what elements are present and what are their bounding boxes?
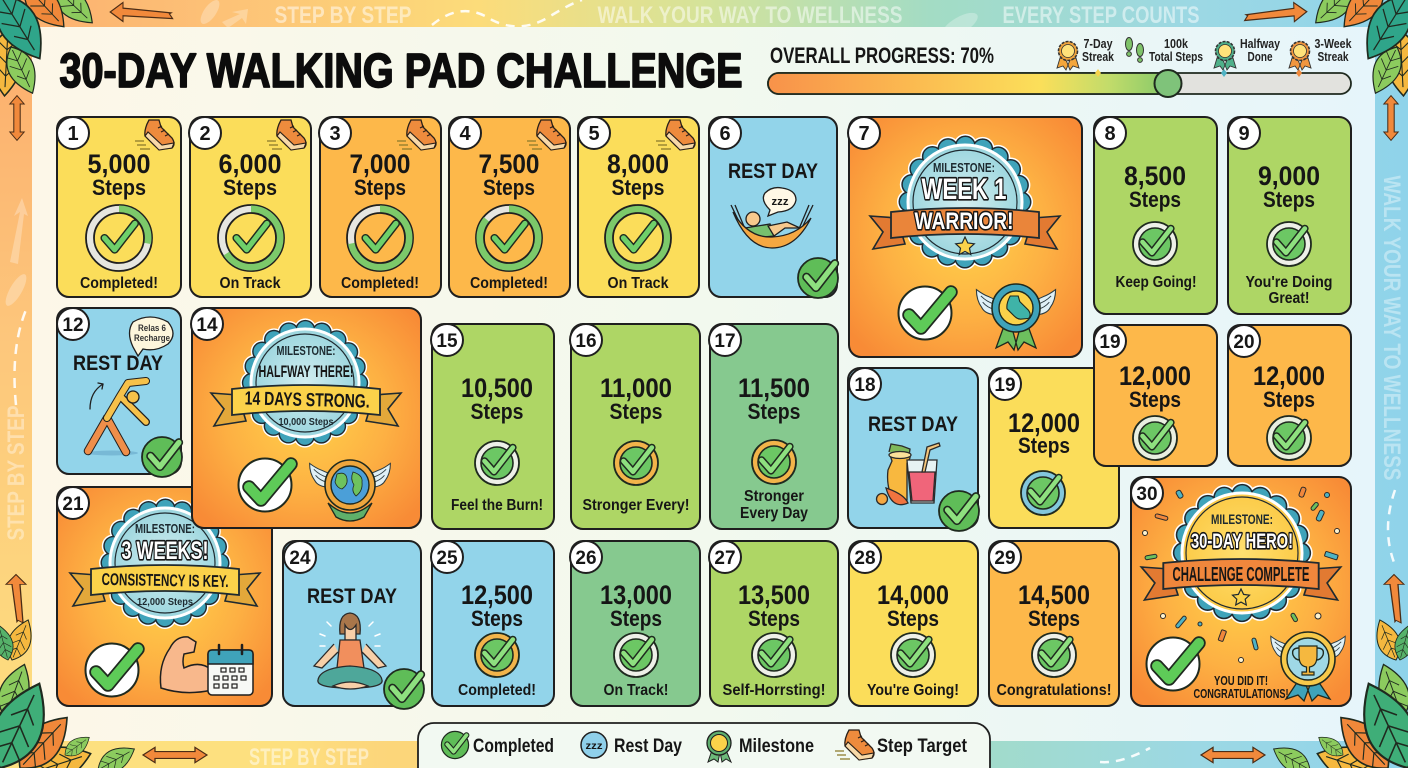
card: day 5: Steps <box>612 175 664 200</box>
card: day 14 milestone: MILESTONE: <box>276 344 336 358</box>
card: day 9: 9 <box>1238 123 1250 145</box>
card: day 21 milestone: 3 WEEKS! <box>122 537 208 565</box>
progress bar <box>768 69 1351 97</box>
card: day 1 <box>57 117 181 297</box>
card: day 20: 20 <box>1233 332 1255 353</box>
card: day 30 milestone: CHALLENGE COMPLETE <box>1172 564 1310 586</box>
achievement: 3-week streak <box>1289 36 1352 70</box>
achievement: halfway done: Done <box>1248 49 1272 64</box>
overall progress label: OVERALL PROGRESS: 70% <box>770 43 994 68</box>
card: day 29: 14,500 <box>1018 580 1090 610</box>
achievement: 3-week streak: 3-Week <box>1314 36 1352 51</box>
card: day 26: 13,000 <box>600 580 672 610</box>
achievement: 100k total steps: 100k <box>1164 36 1189 51</box>
card: day 4: 4 <box>459 123 471 145</box>
achievement: halfway done: Halfway <box>1240 36 1281 51</box>
card: day 25: Steps <box>471 606 523 631</box>
card: day 3: Completed! <box>341 275 419 292</box>
achievement: 7-day streak: 7-Day <box>1084 36 1113 51</box>
card: day 27: 13,500 <box>738 580 810 610</box>
card: day 19 (yellow): Steps <box>1018 433 1070 458</box>
card: day 30 milestone: CONGRATULATIONS! <box>1194 686 1288 701</box>
card: day 26 <box>570 541 700 706</box>
card: day 3 <box>319 117 441 297</box>
card: day 29: 29 <box>994 548 1016 569</box>
card: day 9: You're Doing <box>1246 274 1332 291</box>
card: day 7 milestone: 7 <box>858 123 870 145</box>
card: day 16 <box>570 324 700 529</box>
legend: zzz <box>586 741 602 752</box>
card: day 27: Self-Horrsting! <box>722 682 826 699</box>
card: day 2: 2 <box>199 123 211 145</box>
card: day 18 rest: 18 <box>854 375 876 396</box>
card: day 12 rest: 12 <box>62 315 84 336</box>
card: day 30 milestone: 30 <box>1136 484 1158 505</box>
card: day 30 milestone: 30-DAY HERO! <box>1191 530 1293 553</box>
card: day 29 <box>989 541 1119 706</box>
leaves: bottom right <box>1268 616 1408 768</box>
card: day 1: 5,000 <box>88 149 150 179</box>
legend: Milestone <box>739 736 814 757</box>
card: day 28: 28 <box>854 548 876 569</box>
card: day 5: 5 <box>588 123 600 145</box>
card: day 28: Steps <box>887 606 939 631</box>
leaves: top left <box>0 0 101 99</box>
card: day 28 <box>849 541 978 706</box>
band text: right vertical: WALK YOUR WAY TO WELLNESS <box>1378 176 1405 480</box>
card: day 15: Feel the Burn! <box>451 497 543 514</box>
card: day 3: 7,000 <box>350 149 410 179</box>
card: day 18 rest: REST DAY <box>868 412 958 436</box>
card: day 28: You're Going! <box>867 682 959 699</box>
card: day 28: 14,000 <box>877 580 949 610</box>
card: day 29: Congratulations! <box>996 682 1112 699</box>
band text: left vertical: STEP BY STEP <box>3 406 30 540</box>
card: day 19 (yellow): 12,000 <box>1008 408 1080 438</box>
card: day 5 <box>578 117 699 297</box>
card: day 17: Stronger <box>744 488 804 505</box>
card: day 8: Keep Going! <box>1116 274 1196 291</box>
card: day 14 milestone: 14 DAYS STRONG. <box>244 388 370 413</box>
card: day 15: Steps <box>470 399 524 424</box>
card: day 16: 11,000 <box>600 373 672 403</box>
card: day 20: Steps <box>1263 387 1315 412</box>
title: 30-DAY WALKING PAD CHALLENGE <box>60 45 742 98</box>
card: day 15: 15 <box>436 331 458 352</box>
leaves: top right <box>1307 0 1408 99</box>
card: day 2: Steps <box>223 175 277 200</box>
card: day 6 rest: 6 <box>719 123 731 145</box>
card: day 16: Stronger Every! <box>582 497 690 514</box>
card: day 20: 12,000 <box>1253 361 1325 391</box>
card: day 19 (yellow) <box>989 368 1119 528</box>
card: day 21 milestone: CONSISTENCY IS KEY. <box>101 570 229 591</box>
card: day 17: Steps <box>748 399 800 424</box>
card: day 30 milestone <box>1131 477 1351 706</box>
card: day 12 rest: REST DAY <box>73 351 163 375</box>
card: day 27: 27 <box>714 548 736 569</box>
card: day 24 rest: REST DAY <box>307 584 397 608</box>
card: day 3: Steps <box>354 175 406 200</box>
card: day 5: 8,000 <box>607 149 669 179</box>
legend: Completed <box>473 736 554 757</box>
legend: Rest Day <box>614 736 682 757</box>
card: day 6 rest <box>709 117 838 298</box>
card: day 8: Steps <box>1129 187 1181 212</box>
card: day 12 rest: Relas 6 <box>138 323 166 334</box>
card: day 9: Great! <box>1268 290 1310 307</box>
card: day 26: 26 <box>575 548 597 569</box>
card: day 16: 16 <box>575 331 597 352</box>
achievement: 7-day streak <box>1057 36 1115 70</box>
card: day 4: 7,500 <box>478 149 540 179</box>
card: day 2: 6,000 <box>218 149 282 179</box>
card: day 9: 9,000 <box>1258 161 1320 191</box>
card: day 2: On Track <box>220 275 281 292</box>
card: day 6 rest: zzz <box>772 196 789 208</box>
card: day 27: Steps <box>748 606 800 631</box>
card: day 26: On Track! <box>604 682 668 699</box>
achievement: 7-day streak: Streak <box>1082 49 1115 64</box>
card: day 3: 3 <box>329 123 341 145</box>
card: day 19 (orange) <box>1094 325 1217 466</box>
card: day 20 <box>1228 325 1351 466</box>
card: day 26: Steps <box>610 606 662 631</box>
card: day 19 (orange): 19 <box>1099 332 1121 353</box>
card: day 25: Completed! <box>458 682 536 699</box>
card: day 1: 1 <box>67 123 79 145</box>
card: day 19 (yellow): 19 <box>994 375 1016 396</box>
card: day 21 milestone: MILESTONE: <box>135 522 195 536</box>
card: day 7 milestone: WEEK 1 <box>922 173 1006 206</box>
card: day 12 rest: Recharge <box>134 333 170 344</box>
legend: Step Target <box>877 736 968 757</box>
card: day 17: 17 <box>714 331 736 352</box>
card: day 9 <box>1228 117 1351 314</box>
card: day 25 <box>431 541 554 706</box>
card: day 21 milestone: 21 <box>62 494 84 515</box>
card: day 25: 25 <box>436 548 458 569</box>
legend <box>418 723 990 768</box>
leaves: bottom left <box>0 616 140 768</box>
card: day 17: 11,500 <box>738 373 810 403</box>
card: day 4 <box>449 117 570 297</box>
card: day 21 milestone: 12,000 Steps <box>137 596 193 608</box>
achievement: 100k total steps <box>1126 36 1203 64</box>
card: day 15: 10,500 <box>461 373 533 403</box>
card: day 15 <box>431 324 554 529</box>
card: day 30 milestone: YOU DID IT! <box>1214 673 1268 688</box>
card: day 24 rest: 24 <box>289 548 311 569</box>
band text: top step by step: STEP BY STEP <box>274 2 412 29</box>
card: day 8: 8 <box>1104 123 1116 145</box>
card: day 5: On Track <box>608 275 669 292</box>
achievement: 3-week streak: Streak <box>1318 49 1349 64</box>
card: day 19 (orange): Steps <box>1129 387 1181 412</box>
card: day 29: Steps <box>1028 606 1080 631</box>
card: day 8: 8,500 <box>1124 161 1186 191</box>
card: day 25: 12,500 <box>461 580 533 610</box>
card: day 4: Completed! <box>470 275 548 292</box>
card: day 24 rest <box>283 541 424 709</box>
achievement: 100k total steps: Total Steps <box>1149 49 1203 64</box>
card: day 27 <box>709 541 838 706</box>
card: day 7 milestone <box>848 117 1082 357</box>
card: day 9: Steps <box>1263 187 1315 212</box>
card: day 14 milestone <box>191 308 421 528</box>
card: day 12 rest <box>57 308 182 477</box>
card: day 1: Steps <box>92 175 146 200</box>
card: day 7 milestone: MILESTONE: <box>933 161 995 175</box>
card: day 19 (orange): 12,000 <box>1119 361 1191 391</box>
card: day 2 <box>189 117 311 297</box>
card: day 8 <box>1094 117 1217 314</box>
card: day 14 milestone: 10,000 Steps <box>278 416 334 428</box>
card: day 21 milestone <box>57 487 272 706</box>
card: day 14 milestone: HALFWAY THERE! <box>258 362 354 381</box>
card: day 30 milestone: MILESTONE: <box>1211 511 1273 527</box>
card: day 14 milestone: 14 <box>196 315 218 336</box>
card: day 17: Every Day <box>740 505 808 522</box>
card: day 4: Steps <box>483 175 535 200</box>
achievement: halfway done <box>1214 36 1281 70</box>
card: day 6 rest: REST DAY <box>728 159 818 183</box>
card: day 17 <box>709 324 838 529</box>
card: day 18 rest <box>848 368 979 531</box>
card: day 1: Completed! <box>80 275 158 292</box>
card: day 7 milestone: WARRIOR! <box>914 208 1014 235</box>
band text: top walk your way to wellness: WALK YOUR WAY TO WELLNESS <box>598 2 902 29</box>
card: day 16: Steps <box>610 399 662 424</box>
band text: top every step counts: EVERY STEP COUNTS <box>1002 2 1200 29</box>
